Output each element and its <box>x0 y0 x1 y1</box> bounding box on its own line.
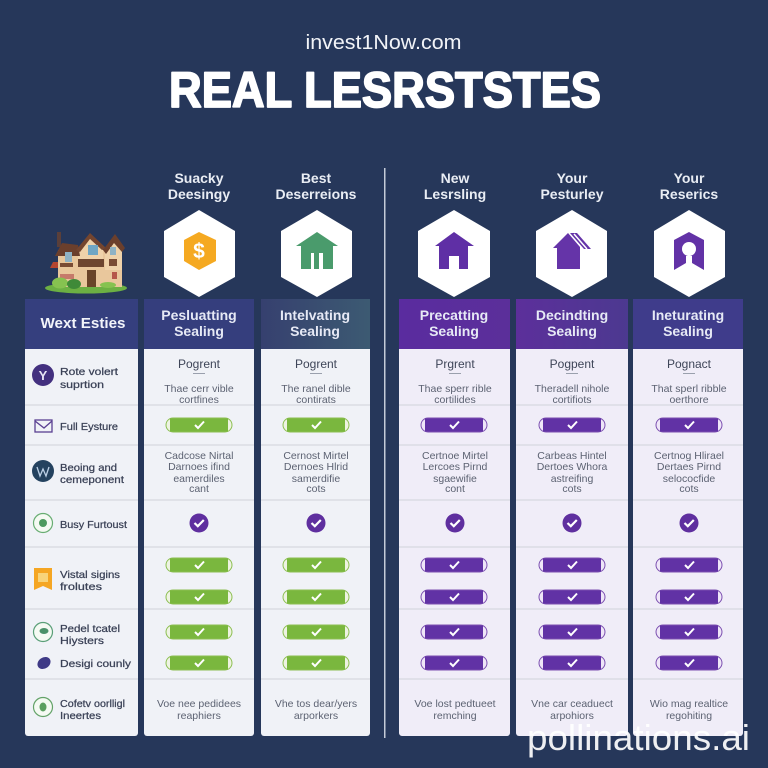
column 1 text <box>157 357 241 722</box>
row label: Busy Furtoust <box>60 519 127 531</box>
column 2 text: contirats <box>296 394 336 406</box>
column 3 text: remching <box>433 710 477 722</box>
header: column 4 <box>516 299 628 349</box>
row label: suprtion <box>60 379 104 391</box>
column 1 text: cortfines <box>179 394 219 406</box>
icon: keyhole hexagon <box>654 210 725 297</box>
column 3 text: sgaewifie <box>433 473 477 485</box>
column 1 text: Darnoes ifind <box>168 461 230 473</box>
column 3 text: Voe lost pedtueet <box>414 698 496 710</box>
column headings: Deserreions <box>276 186 357 202</box>
column 5 text: regohiting <box>666 710 712 722</box>
icon: purple blob <box>35 654 53 672</box>
row label: Vistal sigins <box>60 569 120 581</box>
column 3 text: Lercoes Pirnd <box>423 461 488 473</box>
header: feature labels: Wext Esties <box>40 316 126 332</box>
icon: house illustration <box>45 232 127 294</box>
header: column 3: Precatting <box>420 307 488 323</box>
icon: envelope <box>35 420 52 432</box>
column 1 text: reaphiers <box>177 710 221 722</box>
column 5 text: selococfide <box>663 473 715 485</box>
column 4 text: Pogpent <box>550 357 595 371</box>
watermark: pollinations.ai <box>527 717 750 758</box>
column 5 text: Dertaes Pirnd <box>657 461 721 473</box>
header: column 5: Sealing <box>663 323 713 339</box>
column 3 text: Certnoe Mirtel <box>422 450 488 462</box>
row label: Full Eysture <box>60 421 118 433</box>
row label: cemeponent <box>60 474 124 486</box>
header: column 1 <box>144 299 254 349</box>
column 1 text: Thae cerr vible <box>164 383 234 395</box>
column 4 text: cots <box>562 483 582 495</box>
column 5 text: Wio mag realtice <box>650 698 728 710</box>
row label: frolutes <box>60 581 102 593</box>
column 3 text: cortilides <box>434 394 476 406</box>
row label: Pedel tcatel <box>60 623 120 635</box>
row label: Rote volert <box>60 366 118 378</box>
column headings: Lesrsling <box>424 186 486 202</box>
panel: column 5 <box>633 299 743 736</box>
header: column 4: Decindting <box>536 307 608 323</box>
column 2 text: The ranel dible <box>281 383 351 395</box>
purple status marks <box>656 418 722 670</box>
icon: bank hexagon <box>281 210 352 297</box>
column headings: Deesingy <box>168 186 230 202</box>
column headings: Best <box>301 170 332 186</box>
header: column 4: Sealing <box>547 323 597 339</box>
column 1 text: cant <box>189 483 209 495</box>
column 3 text: cont <box>445 483 465 495</box>
panel: column 2 <box>261 299 370 736</box>
column headings: Your <box>557 170 588 186</box>
column 3 text: Thae sperr rible <box>418 383 492 395</box>
column 1 text: eamerdiles <box>173 473 225 485</box>
icon: house hexagon <box>418 210 490 297</box>
column 2 text: samerdifie <box>292 473 340 485</box>
header: feature labels <box>25 299 138 349</box>
column 1 text: Voe nee pedidees <box>157 698 241 710</box>
column 2 text: cots <box>306 483 326 495</box>
column 4 text: astreifing <box>551 473 593 485</box>
column 2 text: Dernoes Hlrid <box>284 461 348 473</box>
header: column 2: Intelvating <box>280 307 350 323</box>
column 5 text <box>650 357 728 722</box>
site name: invest1Now.com <box>306 32 462 54</box>
header: column 2 <box>261 299 370 349</box>
column 4 text: arpohiors <box>550 710 594 722</box>
row label: Hiysters <box>60 635 104 647</box>
icon: leaf ring <box>34 622 52 642</box>
icon: orange badge <box>34 568 52 590</box>
row label: Desigi counly <box>60 658 132 670</box>
column 5 text: oerthore <box>669 394 709 406</box>
column 5 text: That sperl ribble <box>651 383 727 395</box>
icon: roof hexagon <box>536 210 607 297</box>
purple status marks <box>421 418 487 670</box>
header: column 3 <box>399 299 510 349</box>
header: column 5 <box>633 299 743 349</box>
column headings: New <box>441 170 469 186</box>
panel: column 4 <box>516 299 628 736</box>
header: column 1: Sealing <box>174 323 224 339</box>
icon: dollar hexagon: $ <box>193 240 205 263</box>
column 3 text <box>414 357 496 722</box>
column 5 text: cots <box>679 483 699 495</box>
column headings: Reserics <box>660 186 718 202</box>
header: column 5: Ineturating <box>652 307 724 323</box>
row label: Ineertes <box>60 710 101 722</box>
purple status marks <box>539 418 605 670</box>
header: column 3: Sealing <box>429 323 479 339</box>
panel: column 3 <box>399 299 510 736</box>
icon: green ring <box>34 514 52 532</box>
green status marks <box>166 418 232 670</box>
column headings: Suacky <box>174 170 224 186</box>
header: column 1: Pesluatting <box>161 307 237 323</box>
column 2 text: Cernost Mirtel <box>283 450 349 462</box>
panel: column 1 <box>144 299 254 736</box>
row label: Cofetv oorlligl <box>60 698 125 710</box>
row label: Beoing and <box>60 462 117 474</box>
column 4 text: Carbeas Hintel <box>537 450 607 462</box>
column 2 text <box>275 357 357 722</box>
column headings <box>168 170 718 202</box>
icon: dark circle <box>32 460 54 482</box>
column 2 text: Vhe tos dear/yers <box>275 698 357 710</box>
header: column 2: Sealing <box>290 323 340 339</box>
panel: feature labels column <box>25 299 138 736</box>
icon: purple circle <box>32 364 54 386</box>
column 3 text: Prgrent <box>435 357 475 371</box>
column 4 text: Vne car ceaduect <box>531 698 613 710</box>
column headings: Pesturley <box>540 186 604 202</box>
icon: dollar hexagon <box>164 210 235 297</box>
column 2 text: arporkers <box>294 710 338 722</box>
column 4 text: Theradell nihole <box>535 383 610 395</box>
column 5 text: Pognact <box>667 357 712 371</box>
green status marks <box>283 418 349 670</box>
center divider <box>384 168 386 738</box>
column 5 text: Certnog Hlirael <box>654 450 724 462</box>
column headings: Your <box>674 170 705 186</box>
column 4 text <box>531 357 613 722</box>
column 4 text: cortifiots <box>552 394 592 406</box>
icon: purple circle: Y <box>39 368 48 383</box>
column 4 text: Dertoes Whora <box>537 461 607 473</box>
column 1 text: Cadcose Nirtal <box>165 450 233 462</box>
icon: green ring with leaf <box>34 698 52 716</box>
title: REAL LESRSTSTES <box>169 62 601 118</box>
column 2 text: Pogrent <box>295 357 338 371</box>
column 1 text: Pogrent <box>178 357 221 371</box>
